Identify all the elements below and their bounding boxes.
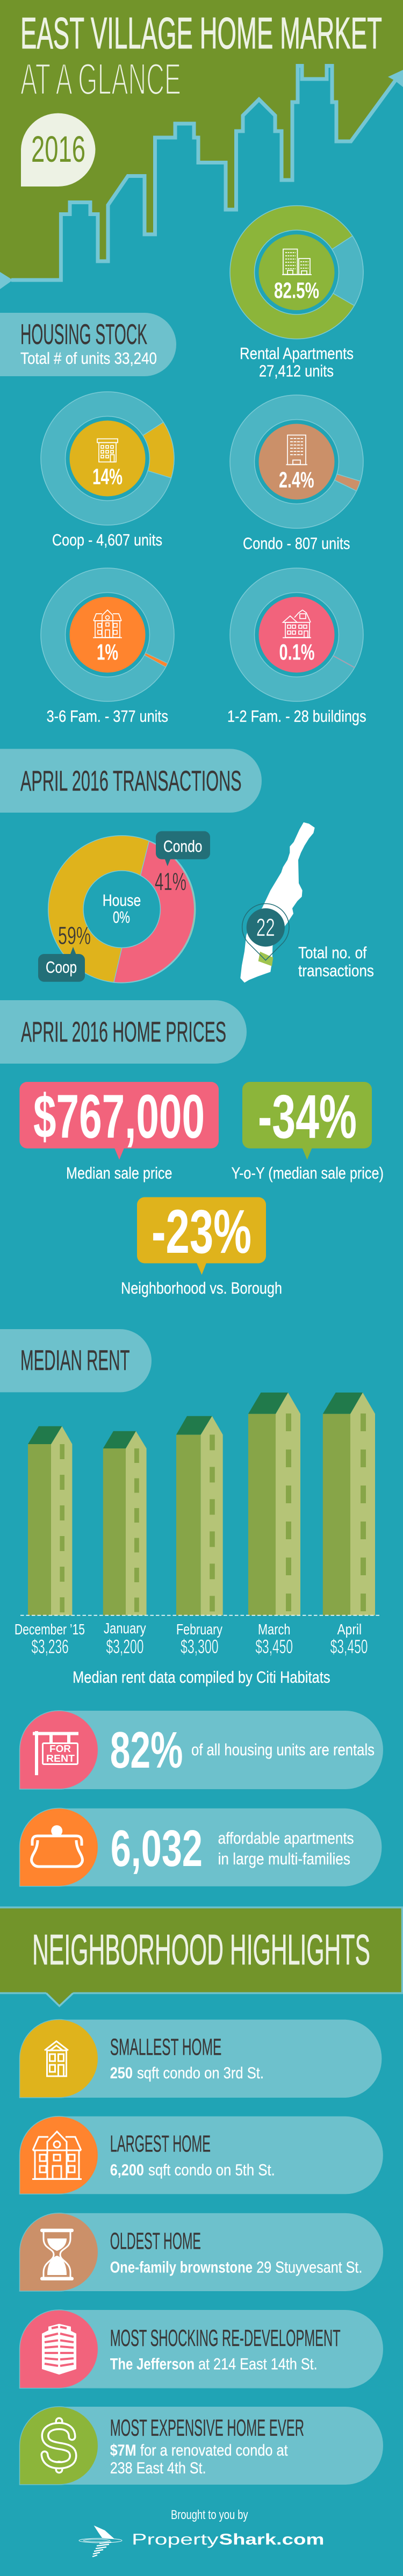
highlight: smallest home: sqft condo on 3rd St. (137, 2064, 264, 2082)
callout: condo: Condo (163, 837, 202, 856)
highlight: most expensive home ever: 238 East 4th St. (110, 2459, 206, 2477)
callout: median sale price: Median sale price (66, 1164, 172, 1182)
stat panel: rentals share (19, 1711, 383, 1789)
stat panel: rentals share: 82% (110, 1721, 183, 1779)
highlight: most expensive home ever: $7M (110, 2442, 136, 2459)
map: manhattan with pin: transactions (298, 961, 374, 980)
icon: apartment buildings (282, 249, 312, 275)
axis labels (15, 1620, 368, 1657)
donut: 3-6 family: 3-6 Fam. - 377 units (47, 707, 168, 726)
callout: neighborhood vs borough: -23% (152, 1197, 251, 1266)
map: manhattan with pin (240, 822, 374, 982)
callout: median sale price (19, 1082, 219, 1182)
donut: condo (230, 395, 363, 552)
icon: coin purse (32, 1825, 82, 1867)
banner: neighborhood highlights (0, 1907, 402, 2006)
header with skyline (0, 0, 403, 289)
icon: for rent sign: FOR (49, 1743, 71, 1754)
heading: april 2016 home prices (0, 1000, 247, 1064)
donut: coop: Coop - 4,607 units (52, 530, 162, 549)
callout: median sale price: $767,000 (33, 1082, 205, 1151)
year badge: 2016 (31, 128, 85, 170)
donut chart: transactions by type: 0% (113, 908, 130, 927)
icon: for rent sign: RENT (46, 1753, 75, 1764)
donut: coop: 14% (92, 464, 123, 489)
bar: april (323, 1393, 375, 1616)
donut: rental apartments: Rental Apartments (240, 344, 354, 363)
heading: median rent: MEDIAN RENT (20, 1345, 130, 1376)
highlight: smallest home (19, 2020, 382, 2098)
highlight: oldest home: 29 Stuyvesant St. (256, 2259, 362, 2277)
donut: 1-2 family: 0.1% (279, 640, 315, 664)
callout: neighborhood vs borough: Neighborhood vs. Borough (121, 1279, 282, 1297)
axis labels: $3,450 (255, 1635, 293, 1657)
axis labels: March (258, 1621, 290, 1638)
footer credit: Shark.com (219, 2531, 325, 2548)
stat panel: affordable apartments (19, 1808, 382, 1886)
icon: condo tower (286, 435, 307, 464)
highlight: largest home: sqft condo on 5th St. (148, 2162, 275, 2179)
donut: rental apartments: 82.5% (274, 278, 319, 303)
callout: coop: Coop (46, 958, 77, 977)
panel: housing stock heading (0, 313, 176, 376)
callout: year over year (231, 1082, 384, 1182)
highlight: most expensive home ever: for a renovated condo at (140, 2442, 288, 2459)
axis labels: $3,236 (31, 1635, 69, 1657)
bar: january (103, 1431, 147, 1616)
axis labels: $3,450 (330, 1635, 368, 1657)
subtitle: AT A GLANCE (20, 54, 181, 104)
callout: year over year: -34% (258, 1082, 357, 1151)
heading: april 2016 home prices: APRIL 2016 HOME PRICES (21, 1016, 226, 1048)
icon: multi-family house (93, 610, 122, 637)
stat panel: affordable apartments: in large multi-families (218, 1849, 350, 1868)
highlight: oldest home (19, 2213, 383, 2291)
stat panel: affordable apartments: affordable apartments (218, 1829, 354, 1848)
highlight: largest home: LARGEST HOME (110, 2131, 211, 2157)
footer credit (79, 2508, 325, 2557)
callout: neighborhood vs borough (121, 1197, 282, 1297)
heading: april 2016 transactions (0, 749, 262, 813)
icon: hourglass (40, 2229, 74, 2280)
heading: median rent (0, 1329, 152, 1392)
donut: rental apartments (230, 206, 363, 381)
stat panel: affordable apartments: 6,032 (111, 1820, 203, 1877)
donut: condo: 2.4% (279, 467, 314, 492)
highlight: most shocking re-development (19, 2310, 383, 2388)
icon: dollar sign (45, 2421, 73, 2470)
axis labels: April (337, 1621, 362, 1638)
highlight: smallest home: SMALLEST HOME (110, 2034, 221, 2061)
donut: 3-6 family (41, 568, 174, 726)
icon: large home (32, 2132, 82, 2179)
panel: housing stock heading: Total # of units 33,240 (20, 349, 157, 368)
icon: for rent sign (33, 1731, 78, 1775)
icon: tower (42, 2324, 76, 2374)
year badge (21, 113, 96, 186)
footer credit: Brought to you by (171, 2508, 248, 2522)
donut: condo: Condo - 807 units (243, 534, 350, 552)
highlight: oldest home: OLDEST HOME (110, 2228, 201, 2255)
icon: coop building (97, 439, 118, 462)
highlight: largest home (19, 2116, 383, 2194)
icon: family house (283, 610, 311, 637)
highlight: most shocking re-development: The Jefferson (110, 2356, 195, 2373)
bar: february (176, 1416, 223, 1616)
icon: small home (45, 2041, 68, 2076)
axis labels: $3,200 (106, 1635, 143, 1657)
donut chart: transactions by type: 41% (155, 867, 186, 895)
bar: march (248, 1393, 300, 1616)
highlight: oldest home: One-family brownstone (110, 2259, 253, 2277)
donut: 3-6 family: 1% (97, 640, 118, 664)
bar chart: median rent buildings: Median rent data compiled by Citi Habitats (73, 1668, 330, 1687)
axis labels: February (176, 1621, 222, 1638)
axis labels: $3,300 (181, 1635, 219, 1657)
axis labels: January (104, 1620, 146, 1637)
bar chart: median rent buildings (15, 1393, 380, 1687)
callout: condo (156, 831, 210, 866)
highlight: largest home: 6,200 (110, 2162, 144, 2179)
map: manhattan with pin: Total no. of (298, 943, 367, 962)
donut: 1-2 family (227, 568, 366, 726)
donut chart: transactions by type: House (103, 891, 141, 910)
highlight: most shocking re-development: at 214 East 14th St. (198, 2356, 318, 2373)
donut: 1-2 family: 1-2 Fam. - 28 buildings (227, 707, 366, 726)
heading: april 2016 transactions: APRIL 2016 TRANSACTIONS (20, 765, 242, 797)
skyline arrow line (0, 66, 403, 289)
donut chart: transactions by type: 59% (58, 922, 91, 950)
axis labels: December ’15 (15, 1621, 85, 1638)
footer credit: Property (132, 2531, 219, 2548)
map: manhattan with pin: 22 (256, 914, 275, 942)
highlight: smallest home: 250 (110, 2064, 133, 2082)
island silhouette (240, 822, 315, 982)
highlight: most expensive home ever (19, 2407, 383, 2485)
callout: coop (38, 947, 85, 982)
olive sky above skyline (0, 0, 403, 280)
icon: shark fin logo (79, 2525, 122, 2557)
panel: housing stock heading: HOUSING STOCK (20, 319, 147, 350)
bar: december (28, 1426, 72, 1616)
donut: coop (41, 392, 174, 549)
donut: rental apartments: 27,412 units (259, 361, 334, 381)
donut chart: transactions by type (38, 831, 210, 983)
